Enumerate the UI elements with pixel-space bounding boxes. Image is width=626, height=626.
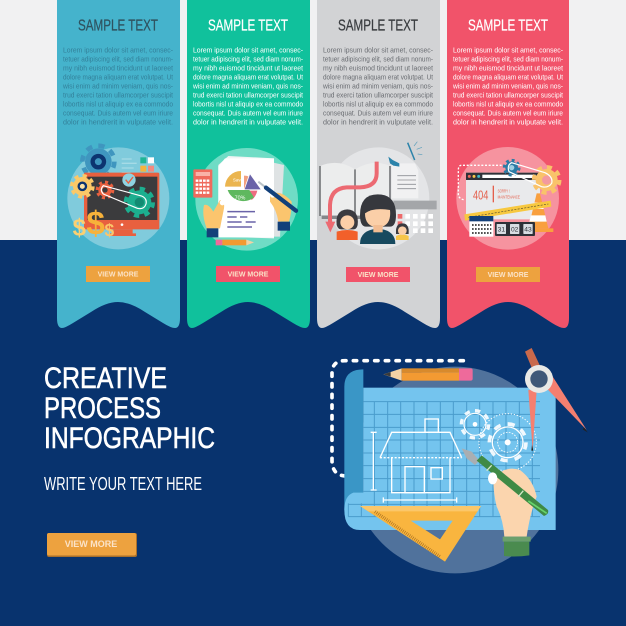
ribbon shape 4: [447, 0, 569, 328]
illustration: report and pie chart: 70%: [235, 195, 246, 201]
body text 3: dolor in hendrerit in vulputate velit.: [323, 118, 433, 126]
body text 2: tetuer adipiscing elit, sed diam nonum-: [193, 56, 304, 64]
set square ruler: [360, 506, 481, 562]
body text 4: my nibh euismod tincidunt ut laoreet: [453, 64, 563, 72]
main button: [47, 533, 137, 557]
body text 4: [452, 46, 564, 126]
title: [44, 362, 215, 455]
button 3: VIEW MORE: [358, 272, 399, 279]
background navy: [0, 240, 626, 626]
button 4: [476, 267, 540, 282]
body text 1: tetuer adipiscing elit, sed diam nonum-: [63, 56, 174, 64]
body text 3: Lorem ipsum dolor sit amet, consec-: [323, 46, 434, 54]
blueprint sheet: [344, 369, 556, 530]
illustration: report and pie chart: Save: [233, 178, 243, 183]
body text 1: wisi enim ad minim veniam, quis nos-: [62, 82, 174, 90]
hand holding pen: [462, 448, 548, 557]
background top band: [0, 0, 626, 240]
heading 4: SAMPLE TEXT: [468, 18, 548, 34]
heading 1: SAMPLE TEXT: [78, 18, 158, 34]
body text 1: my nibh euismod tincidunt ut laoreet: [63, 64, 173, 72]
body text 2: wisi enim ad minim veniam, quis nos-: [192, 82, 304, 90]
panel: ribbon 1: [57, 0, 180, 328]
body text 1: lobortis nisl ut aliquip ex ea commodo: [63, 100, 173, 108]
body text 2: lobortis nisl ut aliquip ex ea commodo: [193, 100, 303, 108]
body text 4: Lorem ipsum dolor sit amet, consec-: [453, 46, 564, 54]
illustration: gears and monitor: $: [86, 206, 105, 243]
body text 2: consequat. Duis autem vel eum iriure: [193, 110, 303, 118]
body text 4: dolore magna aliquam erat volutpat. Ut: [453, 74, 563, 82]
button 4: VIEW MORE: [488, 272, 529, 279]
title: CREATIVE: [44, 362, 167, 395]
body text 1: trud exerci tation ullamcorper suscipit: [63, 92, 173, 100]
body text 3: my nibh euismod tincidunt ut laoreet: [323, 64, 433, 72]
body text 3: dolore magna aliquam erat volutpat. Ut: [323, 74, 433, 82]
main button: VIEW MORE: [65, 539, 117, 549]
body text 3: tetuer adipiscing elit, sed diam nonum-: [323, 56, 434, 64]
illustration: blueprint: [332, 348, 588, 573]
illustration: 404 maintenance: 404: [473, 188, 488, 202]
button 1: VIEW MORE: [98, 272, 139, 278]
body text 1: consequat. Duis autem vel eum iriure: [63, 110, 173, 118]
panel: ribbon 3: [317, 0, 440, 328]
illustration: team and plan: [320, 142, 437, 249]
body text 2: my nibh euismod tincidunt ut laoreet: [193, 64, 303, 72]
title: PROCESS: [44, 392, 161, 425]
body text 4: trud exerci tation ullamcorper suscipit: [453, 92, 563, 100]
heading 3: SAMPLE TEXT: [338, 18, 418, 34]
body text 2: dolor in hendrerit in vulputate velit.: [193, 118, 303, 126]
body text 1: [62, 46, 174, 126]
illustration: gears and monitor: $: [105, 220, 115, 240]
button 2: [216, 266, 280, 282]
illustration: 404 maintenance: [456, 147, 559, 250]
panel: ribbon 4: [447, 0, 569, 328]
body text 3: consequat. Duis autem vel eum iriure: [323, 110, 433, 118]
ribbon shape 3: [317, 0, 440, 328]
body text 4: tetuer adipiscing elit, sed diam nonum-: [453, 56, 564, 64]
illustration: report and pie chart: [193, 148, 298, 251]
backdrop circle: [352, 367, 558, 573]
body text 1: dolor in hendrerit in vulputate velit.: [63, 118, 173, 126]
house drawing: [371, 419, 462, 503]
body text 2: [192, 46, 304, 126]
button 3: [346, 267, 410, 282]
illustration: 404 maintenance: 43: [524, 226, 532, 233]
illustration: 404 maintenance: SORRY !: [498, 189, 510, 194]
illustration: gears and monitor: $: [73, 214, 86, 241]
title: INFOGRAPHIC: [44, 422, 215, 455]
heading 2: SAMPLE TEXT: [208, 18, 288, 34]
body text 3: wisi enim ad minim veniam, quis nos-: [322, 82, 434, 90]
body text 2: trud exerci tation ullamcorper suscipit: [193, 92, 303, 100]
body text 4: dolor in hendrerit in vulputate velit.: [453, 118, 563, 126]
gears drawing: [461, 411, 536, 471]
compass: [525, 348, 588, 451]
pencil: [383, 368, 473, 381]
ribbon shape 2: [187, 0, 310, 328]
illustration: 404 maintenance: 02: [511, 226, 519, 233]
body text 3: lobortis nisl ut aliquip ex ea commodo: [323, 100, 433, 108]
body text 1: dolore magna aliquam erat volutpat. Ut: [63, 74, 173, 82]
body text 4: lobortis nisl ut aliquip ex ea commodo: [453, 100, 563, 108]
body text 3: [322, 46, 434, 126]
panel: ribbon 2: [187, 0, 310, 328]
body text 4: consequat. Duis autem vel eum iriure: [453, 110, 563, 118]
illustration: 404 maintenance: 31: [498, 226, 505, 233]
body text 3: trud exerci tation ullamcorper suscipit: [323, 92, 433, 100]
body text 2: dolore magna aliquam erat volutpat. Ut: [193, 74, 303, 82]
subtitle: WRITE YOUR TEXT HERE: [44, 474, 202, 494]
illustration: 404 maintenance: MAINTENANCE: [498, 195, 520, 200]
body text 2: Lorem ipsum dolor sit amet, consec-: [193, 46, 304, 54]
button 2: VIEW MORE: [228, 272, 269, 278]
button 1: [86, 266, 150, 282]
body text 1: Lorem ipsum dolor sit amet, consec-: [63, 46, 174, 54]
ribbon shape 1: [57, 0, 180, 328]
illustration: gears and monitor: [67, 146, 169, 249]
dashed path: [332, 361, 463, 476]
body text 4: wisi enim ad minim veniam, quis nos-: [452, 82, 564, 90]
